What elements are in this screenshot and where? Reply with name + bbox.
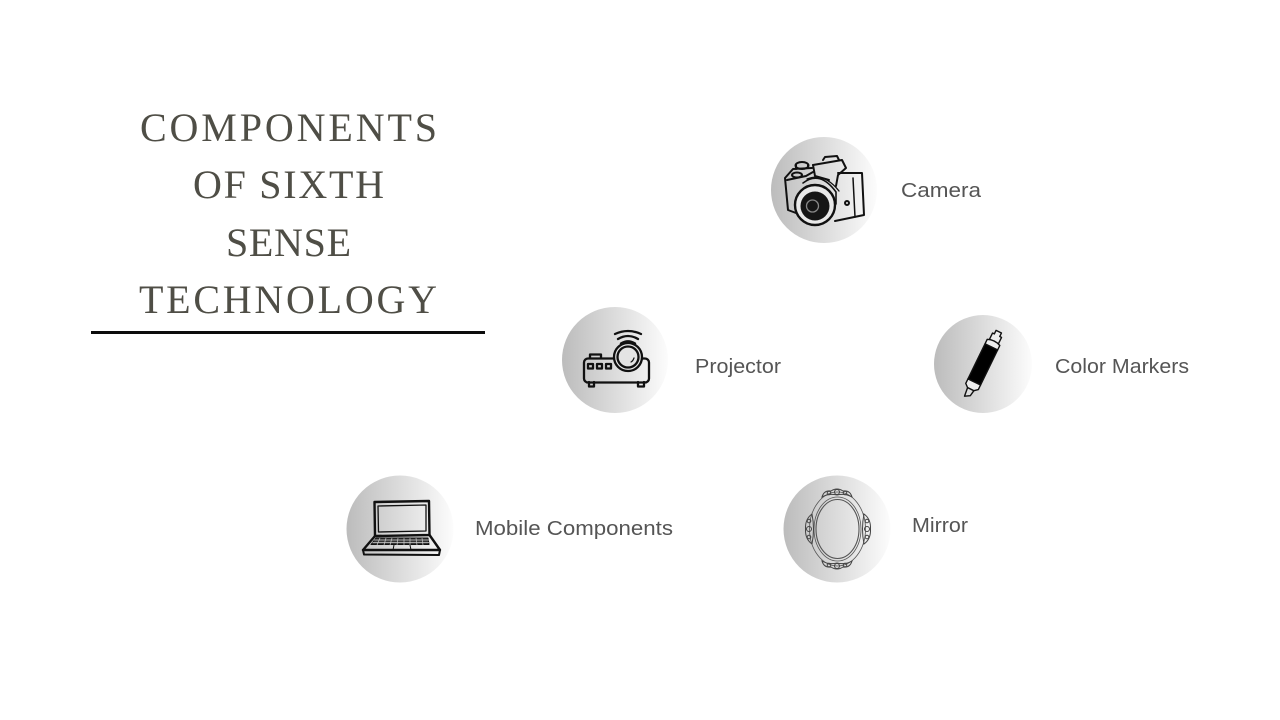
item: mirror (784, 476, 968, 582)
label: color markers: Color Markers (1055, 356, 1189, 378)
label: camera: Camera (901, 180, 982, 202)
icon: projector (562, 307, 668, 413)
title: OF SIXTH (193, 162, 384, 207)
icon: laptop (346, 476, 454, 582)
item: projector (562, 307, 781, 413)
title: SENSE (226, 220, 351, 265)
item: mobile components (346, 476, 673, 582)
item: camera (771, 137, 982, 243)
label: projector: Projector (695, 356, 781, 378)
label: mobile components: Mobile Components (475, 518, 673, 540)
label: mirror: Mirror (912, 515, 968, 537)
icon: camera (771, 137, 877, 243)
title (139, 105, 437, 322)
item: color markers (934, 315, 1189, 413)
icon: color marker (934, 315, 1032, 413)
title underline (91, 331, 485, 334)
icon: ornate mirror (784, 476, 890, 582)
title: COMPONENTS (140, 105, 437, 150)
title: TECHNOLOGY (139, 277, 437, 322)
